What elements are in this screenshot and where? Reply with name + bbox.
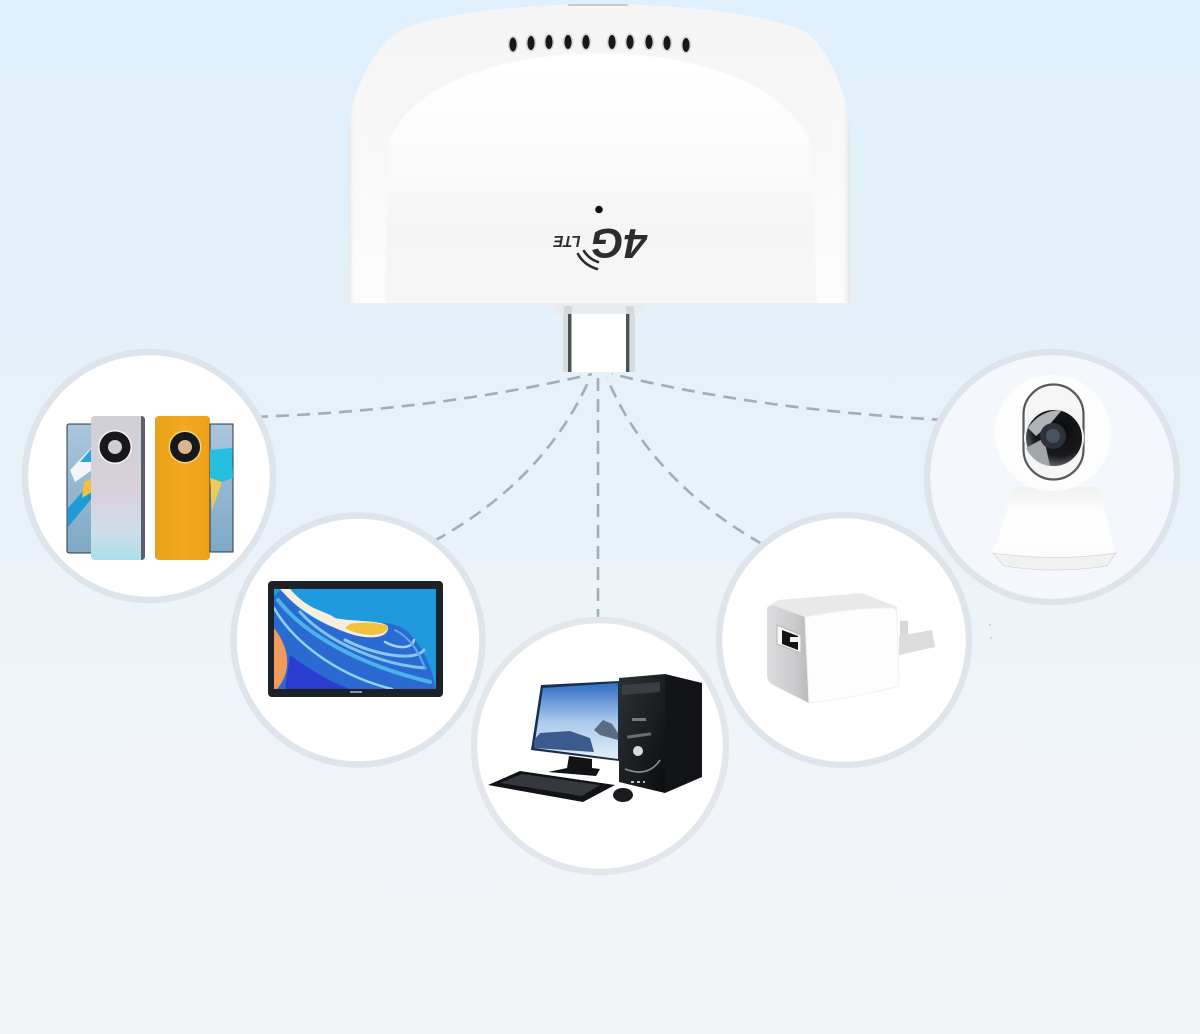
device: phones — [25, 352, 273, 600]
bottom edge — [349, 303, 850, 306]
plug prongs — [900, 621, 908, 637]
front panel — [385, 53, 817, 303]
orange phone — [155, 416, 210, 560]
circle — [927, 352, 1177, 602]
device: desktop computer — [474, 620, 726, 872]
tablet screen — [274, 589, 436, 689]
circle — [719, 515, 969, 765]
back phone right — [210, 424, 233, 552]
tablet frame — [268, 581, 443, 697]
back phone left — [67, 424, 94, 553]
monitor stand — [548, 756, 600, 776]
device: USB charger — [719, 515, 969, 765]
circle — [474, 620, 726, 872]
silver phone — [91, 416, 145, 560]
dashed connection lines — [255, 374, 945, 622]
device: security camera — [927, 352, 1177, 602]
circle — [25, 352, 273, 600]
tablet brand — [350, 691, 362, 693]
adapter shell — [348, 4, 850, 305]
camera head — [995, 375, 1111, 491]
4G LTE logo: 4G — [591, 220, 648, 267]
circle — [234, 516, 482, 764]
mouse — [613, 788, 633, 802]
4G LTE adapter — [348, 4, 850, 372]
device: tablet — [234, 516, 482, 764]
USB port — [777, 625, 801, 653]
shell side shading — [348, 4, 850, 305]
small specks — [989, 624, 992, 639]
charger main face — [805, 608, 899, 703]
connector collar — [555, 305, 643, 315]
indicator light — [595, 206, 603, 213]
4G LTE logo — [552, 220, 648, 269]
charger top face — [767, 593, 897, 622]
monitor — [531, 681, 619, 761]
camera base — [992, 487, 1116, 570]
top seam — [568, 4, 628, 6]
tower case — [619, 674, 702, 793]
lens — [1025, 409, 1083, 467]
vent slots — [509, 34, 690, 53]
charger side face — [767, 605, 809, 703]
base rim — [993, 553, 1116, 570]
4G LTE logo: LTE — [552, 232, 580, 249]
USB-C plug — [563, 314, 635, 372]
keyboard — [488, 771, 615, 802]
lens slot — [1024, 384, 1084, 480]
